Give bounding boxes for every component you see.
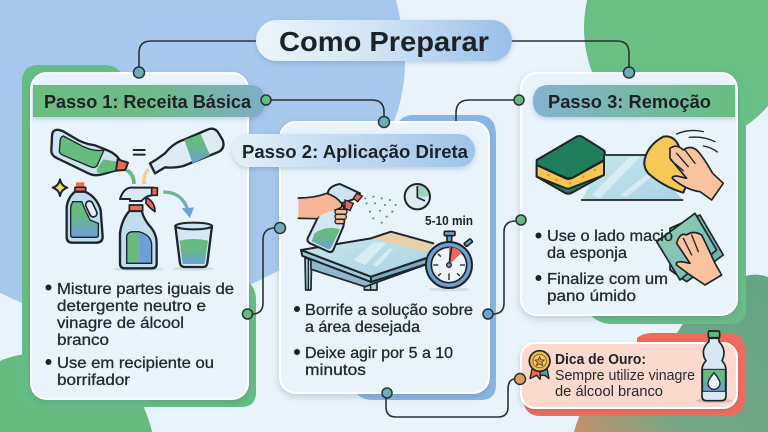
panel 2 heading: Passo 2: Aplicação Direta xyxy=(242,142,469,162)
background blob: blue xyxy=(0,0,405,313)
panel 2 heading xyxy=(232,134,475,167)
icon: spray bottle xyxy=(113,188,163,271)
illustration: sponge on glass xyxy=(537,130,723,285)
tip card xyxy=(521,343,737,408)
icon: gold medal xyxy=(529,351,550,379)
tip text: de álcool branco xyxy=(555,384,663,400)
tip text xyxy=(555,352,695,400)
panel 1 bullets xyxy=(46,281,234,389)
connector: step 3 back to header xyxy=(456,100,515,122)
panel 3 bullets: Use o lado macio xyxy=(547,228,673,245)
panel 2 bullets: minutos xyxy=(305,362,366,379)
panel 2 bullets: a área desejada xyxy=(305,319,420,336)
panel 3 card xyxy=(521,73,737,315)
dot: title to step 3 xyxy=(624,67,634,78)
icon: spray mist xyxy=(364,196,397,224)
background blob: teal bottom right xyxy=(574,275,768,432)
panel 3 bullets: pano úmido xyxy=(547,288,636,305)
panel 3 heading: Passo 3: Remoção xyxy=(548,92,711,112)
icon: spray bottle in hand xyxy=(298,184,362,252)
panel 1 heading xyxy=(33,85,265,117)
icon: detergent jug xyxy=(67,182,103,243)
icon: hand wiping with sponge xyxy=(644,130,723,200)
panel 1 bullets: detergente neutro e xyxy=(57,298,206,315)
tip text: Dica de Ouro: xyxy=(555,352,646,368)
panel 1 bullets: branco xyxy=(57,332,109,349)
icon: detergent bottle pouring xyxy=(51,130,134,184)
panel 1 bullets: Misture partes iguais de xyxy=(57,281,234,298)
title xyxy=(256,20,512,61)
illustration: mixing detergent and vinegar xyxy=(51,129,224,271)
panel 3 heading xyxy=(533,85,735,117)
background blob: green bottom left xyxy=(0,352,152,432)
icon: stopwatch xyxy=(426,231,473,291)
panel 3 xyxy=(521,73,737,315)
dot: step 3 header xyxy=(514,95,524,105)
panel 2 bullets: Deixe agir por 5 a 10 xyxy=(305,345,453,362)
panel 1 bullets: Use em recipiente ou xyxy=(57,355,214,372)
panel 2 bullets: Borrife a solução sobre xyxy=(305,302,473,319)
icon: vinegar bottle xyxy=(696,331,732,403)
connector: step 2 text to step 3 xyxy=(483,215,526,319)
tip panel backing xyxy=(524,333,745,416)
icon: curved arrow xyxy=(163,192,194,218)
icon: glass pane xyxy=(582,155,683,200)
connector: title to step 1 xyxy=(139,41,256,67)
time label: 5-10 min xyxy=(425,214,473,228)
panel 1 bullets: vinagre de álcool xyxy=(57,315,184,332)
panel 1 xyxy=(31,73,265,399)
panel 1 bullets: borrifador xyxy=(57,372,131,389)
icon: hand with cloth xyxy=(657,213,723,285)
panel 1 heading: Passo 1: Receita Básica xyxy=(44,92,252,112)
icon: sponge xyxy=(537,136,605,194)
panel 2 backing xyxy=(355,115,496,400)
icon: glass with solution xyxy=(173,223,214,271)
title: Como Preparar xyxy=(279,26,489,57)
icon: sparkle xyxy=(53,179,67,196)
illustration: spraying a table xyxy=(298,184,473,291)
tip text: Sempre utilize vinagre xyxy=(555,368,695,384)
panel 2 card xyxy=(280,122,489,393)
connector: step 1 header to step 2 xyxy=(261,95,390,128)
panel 3 bullets: Finalize com um xyxy=(547,271,668,288)
connector: step 2 to golden tip xyxy=(382,374,526,417)
panel 2 xyxy=(232,122,489,393)
icon: vinegar bottle pouring xyxy=(144,129,224,184)
icon: equals sign xyxy=(134,150,145,155)
panel 1 card xyxy=(31,73,248,399)
panel 1 backing xyxy=(22,65,256,407)
icon: glass table xyxy=(301,232,433,290)
dot: title to step 1 xyxy=(134,67,144,78)
panel 3 backing xyxy=(590,120,746,324)
panel 3 bullets: da esponja xyxy=(547,245,627,262)
background blob: green top right xyxy=(584,0,768,143)
connector: step 1 text to step 2 xyxy=(242,222,286,319)
panel 3 bullets xyxy=(536,228,673,305)
icon: wall clock xyxy=(405,184,430,209)
tip panel xyxy=(521,331,737,408)
connector: title to step 3 xyxy=(512,41,629,67)
panel 2 bullets xyxy=(294,302,473,379)
